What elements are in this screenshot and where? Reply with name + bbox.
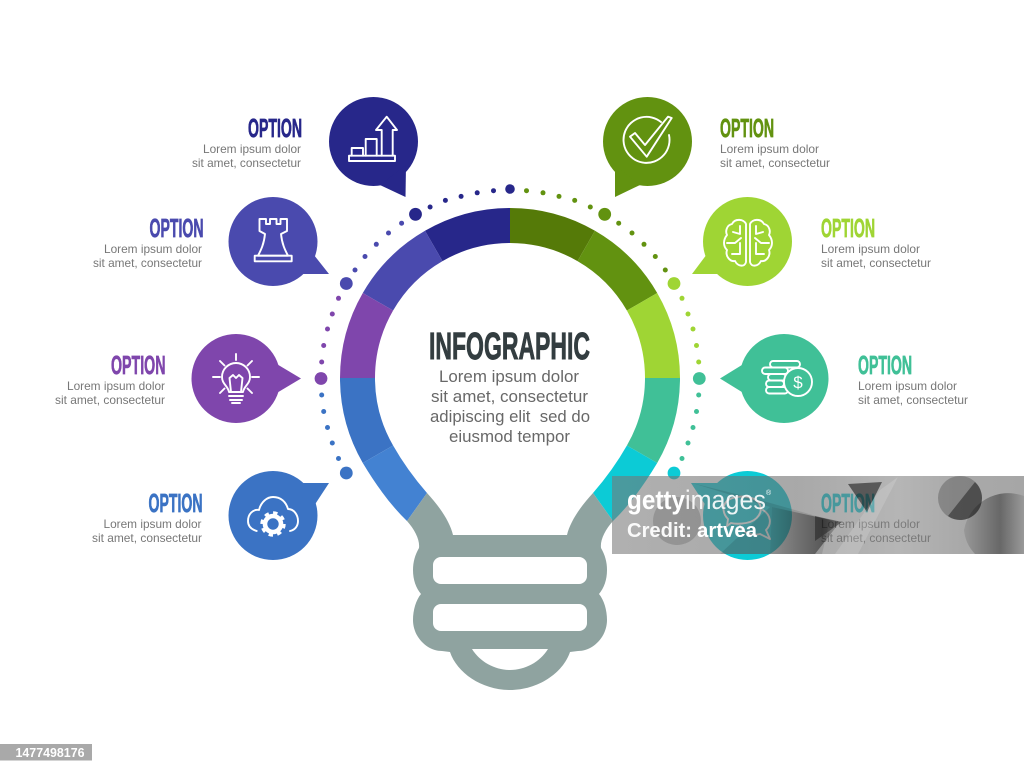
- icon: brain: [724, 220, 772, 266]
- ring segment: teal: [627, 378, 680, 463]
- speech bubble: [692, 197, 792, 286]
- text: sit amet, consectetur: [92, 531, 202, 545]
- text: [720, 142, 830, 170]
- ring segment: blue: [340, 378, 393, 463]
- text: Lorem ipsum dolor: [203, 142, 301, 156]
- image id tag: [0, 744, 92, 760]
- watermark credit: Credit:: [627, 520, 692, 542]
- heading: OPTION: [150, 213, 204, 243]
- ring segment: light blue: [363, 446, 427, 521]
- center text block: eiusmod tempor: [449, 428, 571, 446]
- watermark credit: [627, 520, 758, 542]
- watermark brand: [627, 485, 772, 515]
- text: Lorem ipsum dolor: [720, 142, 819, 156]
- speech bubble: [192, 334, 301, 423]
- text: sit amet, consectetur: [720, 156, 830, 170]
- icon: check mark in circle: [624, 117, 672, 163]
- speech bubble: [228, 197, 329, 286]
- icon: light bulb: [213, 354, 259, 403]
- ring segment: navy: [425, 208, 510, 261]
- lightbulb ring: [340, 208, 680, 521]
- heading: OPTION: [148, 488, 202, 518]
- text: sit amet, consectetur: [821, 531, 931, 545]
- panel: option 1 navy: [192, 97, 418, 197]
- heading: OPTION: [858, 350, 912, 380]
- speech bubble: [691, 471, 792, 560]
- dotted arc: right: [524, 188, 706, 479]
- speech bubble: [329, 97, 418, 197]
- icon: cloud with gear: [248, 497, 298, 535]
- panel: option 7 teal: [720, 334, 968, 423]
- text: Lorem ipsum dolor: [104, 517, 202, 531]
- watermark credit: artvea: [697, 520, 758, 542]
- text: sit amet, consectetur: [858, 393, 968, 407]
- text: Lorem ipsum dolor: [821, 517, 920, 531]
- watermark brand: ®: [766, 489, 772, 497]
- text: [192, 142, 301, 170]
- text: [821, 517, 931, 545]
- text: [858, 379, 968, 407]
- heading: OPTION: [821, 488, 875, 518]
- speech bubble: [720, 334, 828, 423]
- text: Lorem ipsum dolor: [821, 242, 920, 256]
- text: sit amet, consectetur: [192, 156, 301, 170]
- speech bubble: [228, 471, 329, 560]
- icon: growth chart: [349, 117, 397, 161]
- heading: OPTION: [248, 113, 302, 143]
- text: sit amet, consectetur: [55, 393, 165, 407]
- center text block: [430, 368, 590, 446]
- panel: option 8 cyan: [691, 471, 931, 560]
- panel: option 6 lime: [692, 197, 931, 286]
- lightbulb base: [407, 493, 613, 690]
- icon: chess rook: [255, 219, 292, 261]
- text: [92, 517, 202, 545]
- ring segment: cyan: [593, 446, 657, 521]
- center text block: sit amet, consectetur: [431, 388, 589, 406]
- text: sit amet, consectetur: [821, 256, 931, 270]
- text: Lorem ipsum dolor: [858, 379, 957, 393]
- text: [55, 379, 165, 407]
- ring segment: dark green: [510, 208, 595, 261]
- ring segment: green: [578, 231, 657, 310]
- text: [821, 242, 931, 270]
- panel: option 5 green: [603, 97, 830, 197]
- icon: coins: [762, 361, 812, 396]
- panel: option 4 blue: [92, 471, 329, 560]
- center text block: adipiscing elit sed do: [430, 408, 590, 426]
- ring segment: purple: [340, 293, 393, 378]
- heading: OPTION: [720, 113, 774, 143]
- panel: option 3 purple: [55, 334, 301, 423]
- watermark brand: getty: [627, 485, 685, 515]
- image id tag: 1477498176: [16, 746, 85, 760]
- center heading: INFOGRAPHIC: [429, 326, 590, 368]
- panel: option 2 indigo: [93, 197, 329, 286]
- heading: OPTION: [821, 213, 875, 243]
- text: [93, 242, 202, 270]
- speech bubble: [603, 97, 692, 197]
- heading: OPTION: [111, 350, 166, 380]
- text: Lorem ipsum dolor: [67, 379, 165, 393]
- ring segment: indigo: [363, 231, 442, 310]
- text: sit amet, consectetur: [93, 256, 202, 270]
- icon: chat bubbles: [724, 496, 770, 539]
- dotted arc: left: [315, 184, 515, 479]
- ring segment: lime: [627, 293, 680, 378]
- dot: cyan: [668, 467, 680, 479]
- icon: dollar sign: $: [793, 373, 803, 392]
- watermark banner: [612, 476, 1024, 554]
- text: Lorem ipsum dolor: [104, 242, 202, 256]
- center text block: Lorem ipsum dolor: [439, 368, 580, 386]
- watermark brand: images: [685, 485, 766, 515]
